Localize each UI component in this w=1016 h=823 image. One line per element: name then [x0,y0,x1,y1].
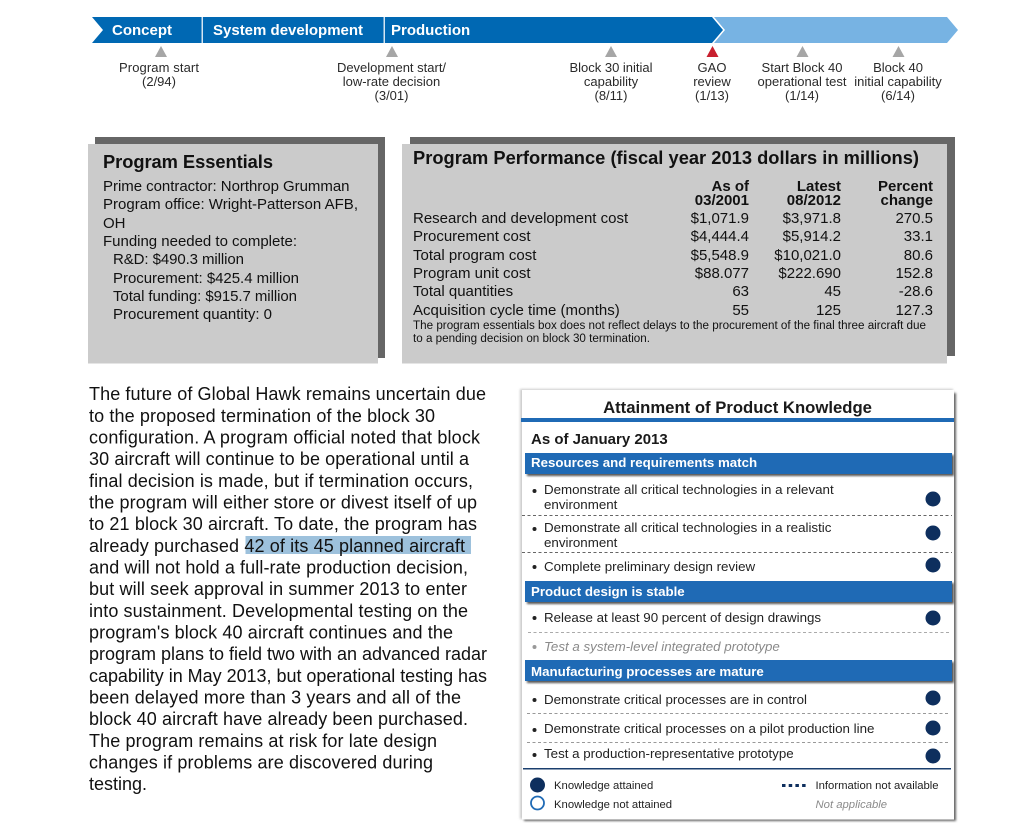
milestone: block 40 initial capability: Block 40 [873,60,923,75]
body text: capability in May 2013, but operational testing has [89,666,487,686]
milestone: program start: (2/94) [142,74,176,89]
heading: program essentials: Program Essentials [103,151,273,172]
panel: attainment of product knowledge [520,389,956,821]
milestone: start block 40 operational test [758,46,847,103]
milestone: block 40 initial capability: (6/14) [881,88,915,103]
milestone: GAO review: review [693,74,731,89]
legend: Not applicable [816,799,887,811]
performance table: Acquisition cycle time (months) [413,302,620,319]
essentials text: OH [103,215,126,232]
milestone: start block 40 operational test: Start Block 40 [762,60,842,75]
body text: changes if problems are discovered during [89,752,433,772]
section: manufacturing processes are mature: Manufacturing processes are mature [531,664,764,679]
essentials text: Funding needed to complete: [103,233,297,250]
performance table: $3,971.8 [783,210,841,227]
section: resources and requirements match: Complete preliminary design review [544,559,755,574]
table note [413,319,926,345]
performance table: Total quantities [413,283,513,300]
body text [89,384,487,794]
performance table: $1,071.9 [691,210,749,227]
section: manufacturing processes are mature: Demonstrate critical processes on a pilot production line [544,721,874,736]
performance table: 127.3 [895,302,933,319]
legend: Knowledge attained [554,780,653,792]
essentials text: Total funding: $915.7 million [113,288,297,305]
table note: to a pending decision on block 30 termination. [413,332,650,345]
timeline [92,17,958,103]
milestone: GAO review: GAO [698,60,726,75]
legend [530,778,939,811]
body text: testing. [89,774,147,794]
section: manufacturing processes are mature: Demonstrate critical processes are in control [544,692,807,707]
body text: been delayed more than 3 years and all of the [89,688,461,708]
phase bar: concept, system development, production [92,17,723,43]
section: product design is stable: Product design is stable [531,584,685,599]
essentials text [103,178,358,323]
section: resources and requirements match [522,453,954,574]
body text: already purchased 42 of its 45 planned aircraft [89,536,465,556]
milestone: development start: low-rate decision [343,74,440,89]
phase bar: future [714,17,958,43]
section: resources and requirements match: Resources and requirements match [531,455,757,470]
performance table: Percent [878,178,933,195]
milestone: block 40 initial capability [854,46,942,103]
milestone: start block 40 operational test: operational test [758,74,847,89]
performance table: $5,914.2 [783,228,841,245]
section: resources and requirements match: Demonstrate all critical technologies in a relevant [544,482,834,497]
table note: The program essentials box does not reflect delays to the procurement of the final three aircraft due [413,319,926,332]
milestone: program start: Program start [119,60,199,75]
section: manufacturing processes are mature [525,660,954,764]
milestone: block 40 initial capability: initial capability [854,74,942,89]
performance table: $88.077 [695,265,749,282]
heading: program performance: Program Performance (fiscal year 2013 dollars in millions) [413,147,919,168]
body text: to 21 block 30 aircraft. To date, the program has [89,514,477,534]
body text: the program will either store or divest itself of up [89,492,477,512]
performance table: $222.690 [778,265,841,282]
performance table: $4,444.4 [691,228,749,245]
legend: Information not available [816,780,939,792]
body text: block 40 aircraft have already been purchased. [89,709,468,729]
body text: but will seek approval in summer 2013 to enter [89,579,467,599]
performance table: 33.1 [904,228,933,245]
milestone: development start: (3/01) [375,88,408,103]
performance table: Latest [797,178,841,195]
essentials text: Procurement: $425.4 million [113,270,299,287]
section: product design is stable: Release at least 90 percent of design drawings [544,610,821,625]
body text: and will not hold a full-rate production decision, [89,558,468,578]
body text: The program remains at risk for late design [89,731,437,751]
performance table: change [880,192,933,209]
phase bar: concept, system development, production: Production [391,22,470,39]
essentials text: Procurement quantity: 0 [113,306,272,323]
performance table: Research and development cost [413,210,629,227]
performance table: 152.8 [895,265,933,282]
milestone: program start [119,46,199,89]
milestone: development start: Development start/ [337,60,446,75]
performance table: 45 [824,283,841,300]
body text: into sustainment. Developmental testing on the [89,601,468,621]
performance table: $5,548.9 [691,247,749,264]
phase bar: concept, system development, production: Concept [112,22,172,39]
section: resources and requirements match: environment [544,497,618,512]
milestone: block 30 initial capability [569,46,653,103]
body text: to the proposed termination of the block 30 [89,406,435,426]
performance table: $10,021.0 [774,247,841,264]
panel: program performance [402,137,955,364]
legend: Knowledge not attained [554,799,672,811]
section: resources and requirements match: environment [544,535,618,550]
performance table: Total program cost [413,247,537,264]
performance table [413,178,933,319]
milestone: start block 40 operational test: (1/14) [785,88,819,103]
performance table: -28.6 [899,283,933,300]
essentials text: Program office: Wright-Patterson AFB, [103,196,358,213]
section: manufacturing processes are mature: Test a production-representative prototype [544,746,794,761]
body text: The future of Global Hawk remains uncertain due [89,384,486,404]
section: resources and requirements match: Demonstrate all critical technologies in a realistic [544,520,832,535]
performance table: Program unit cost [413,265,531,282]
performance table: 63 [732,283,749,300]
body text: configuration. A program official noted that block [89,428,481,448]
heading: attainment: Attainment of Product Knowledge [603,398,872,417]
milestone: GAO review: (1/13) [695,88,729,103]
section: product design is stable: Test a system-level integrated prototype [544,639,780,654]
performance table: 55 [732,302,749,319]
body text: 30 aircraft will continue to be operational until a [89,449,470,469]
body text: program plans to field two with an advanced radar [89,644,487,664]
section: product design is stable [525,581,954,654]
subheading: date: As of January 2013 [531,431,668,448]
performance table: 270.5 [895,210,933,227]
panel: program essentials [88,137,385,364]
milestone: GAO review [693,46,731,103]
body text: final decision is made, but if termination occurs, [89,471,473,491]
body text: program's block 40 aircraft continues and the [89,622,453,642]
essentials text: R&D: $490.3 million [113,251,244,268]
performance table: 125 [816,302,841,319]
performance table: Procurement cost [413,228,531,245]
milestone: block 30 initial capability: capability [584,74,639,89]
performance table: 08/2012 [787,192,841,209]
highlight [246,536,471,554]
milestone: block 30 initial capability: Block 30 initial [569,60,653,75]
milestone: development start [337,46,446,103]
milestone: block 30 initial capability: (8/11) [594,88,628,103]
phase bar: concept, system development, production: System development [213,22,363,39]
performance table: 80.6 [904,247,933,264]
performance table: 03/2001 [695,192,749,209]
performance table: As of [712,178,750,195]
essentials text: Prime contractor: Northrop Grumman [103,178,350,195]
